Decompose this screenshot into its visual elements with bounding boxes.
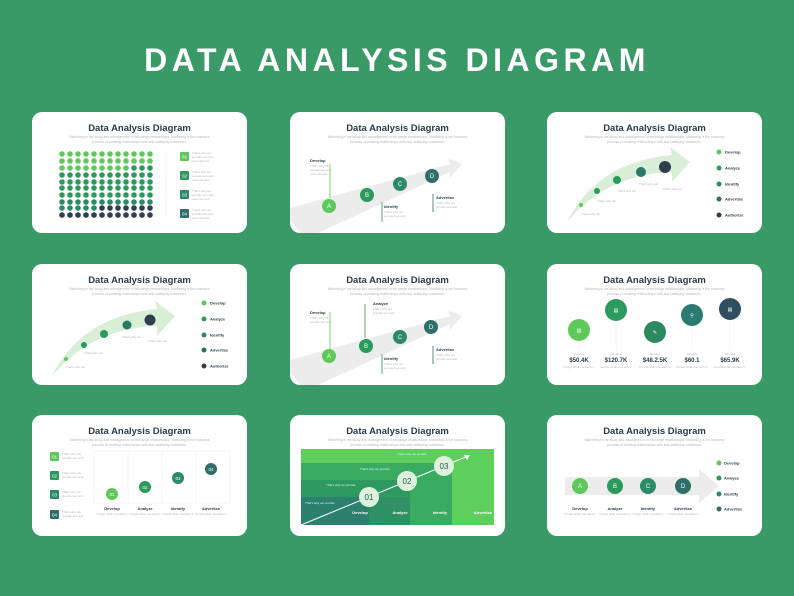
panel: numbered steps: 01: [52, 454, 57, 460]
panel: numbered steps: 04: [208, 467, 214, 472]
panel: value circles: ▤: [728, 307, 733, 313]
panel: numbered steps: [32, 415, 247, 536]
panel: numbered steps: Forget what company's: [130, 512, 161, 516]
legend boxes: That's why we: [192, 170, 211, 174]
panel: value circles: [547, 264, 762, 385]
title: DATA ANALYSIS DIAGRAM: [144, 42, 650, 78]
panel: ABCD diagonal 2: provide text and: [310, 320, 332, 324]
panel: curved arrow 2: That's why we: [148, 339, 167, 343]
legend boxes: 03: [182, 192, 187, 198]
panel: stepped growth: process of creating relationships with and satisfying customers.: [350, 443, 445, 447]
panel: ABCD diagonal 2: [290, 264, 505, 385]
panel: numbered steps: Identify: [171, 506, 186, 511]
panel: curved arrow 2: Marketing is the study and management of exchange relationships. Marketing is the business: [70, 287, 210, 291]
panel: arrow ABCD: Data Analysis Diagram: [603, 426, 706, 437]
panel: numbered steps: That's why we: [62, 490, 81, 494]
panel: numbered steps: That's why we: [62, 471, 81, 475]
legend boxes: That's why we: [192, 208, 211, 212]
panel: value circles: $60.1: [684, 358, 700, 364]
panel: arrow ABCD: Analyze: [724, 476, 740, 480]
panel: arrow ABCD: Advertise: [724, 506, 743, 512]
panel: curved arrow legend: That's why we: [617, 189, 636, 193]
panel: stepped growth: That's why we provide: [360, 467, 390, 471]
panel: numbered steps: provide text and: [62, 494, 84, 498]
panel: dot grid: [32, 112, 247, 233]
panel: curved arrow 2: Identify: [210, 332, 225, 338]
panel: ABCD diagonal 2: Develop: [310, 310, 326, 315]
legend boxes: That's why we: [192, 151, 211, 155]
legend boxes: provide text and: [192, 193, 214, 197]
panel: ABCD diagonal: Advertise: [436, 195, 455, 200]
panel: ABCD diagonal 2: Analyze: [373, 301, 389, 306]
panel: numbered steps: 04: [52, 512, 57, 518]
panel: curved arrow legend: That's why we: [639, 182, 658, 186]
panel: stepped growth: Marketing is the study and management of exchange relationships. Marketing is the business: [328, 438, 468, 442]
panel: stepped growth: Identify: [433, 510, 448, 515]
legend boxes: new columns.: [192, 197, 211, 201]
panel: arrow ABCD: [547, 415, 762, 536]
panel: curved arrow 2: Advertise: [210, 348, 229, 352]
panel: ABCD diagonal 2: D: [429, 325, 434, 331]
panel: numbered steps: Advertise: [202, 506, 221, 511]
legend boxes: 04: [182, 212, 187, 216]
panel: numbered steps: Forget what company's: [196, 512, 227, 516]
legend boxes: provide text and: [192, 155, 214, 159]
panel: numbered steps: 02: [52, 474, 57, 478]
panel: numbered steps: process of creating relationships with and satisfying customers.: [92, 443, 187, 447]
panel: stepped growth: That's why we provide: [305, 501, 335, 505]
panel: curved arrow legend: That's why we: [581, 212, 600, 216]
panel: value circles: $65.9K: [720, 358, 740, 364]
legend boxes: new columns.: [192, 216, 211, 220]
panel: numbered steps: Develop: [104, 506, 120, 511]
panel: stepped growth: 02: [403, 477, 412, 486]
panel: curved arrow 2: [32, 264, 247, 385]
panel: ABCD diagonal: That's why we: [310, 164, 329, 168]
panel: curved arrow legend: Authorize: [725, 212, 744, 218]
panel: arrow ABCD: D: [681, 484, 686, 490]
panel: value circles: Forget what company's: [715, 365, 746, 369]
panel: dot grid: Data Analysis Diagram: [88, 123, 191, 134]
panel: value circles: ✎: [653, 330, 657, 336]
panel: numbered steps: provide text and: [62, 456, 84, 460]
panel: ABCD diagonal: new columns.: [310, 172, 329, 176]
panel: curved arrow legend: process of creating relationships with and satisfying customers.: [607, 140, 702, 144]
panel: ABCD diagonal 2: Advertise: [436, 347, 455, 352]
legend boxes: [180, 151, 214, 220]
panel: stepped growth: 01: [365, 493, 374, 502]
panel: numbered steps: Forget what company's: [97, 512, 128, 516]
panel: arrow ABCD: Forget what company's: [633, 512, 664, 516]
panel: curved arrow legend: That's why we: [597, 199, 616, 203]
panel: arrow ABCD: Identify: [641, 506, 656, 511]
legend boxes: new columns.: [192, 159, 211, 163]
panel: ABCD diagonal: Data Analysis Diagram: [346, 123, 449, 134]
panel: numbered steps: Forget what company's: [163, 512, 194, 516]
panel: arrow ABCD: Identify: [724, 492, 739, 496]
panel: ABCD diagonal 2: That's why we: [373, 307, 392, 311]
panel: ABCD diagonal 2: That's why we: [310, 316, 329, 320]
panel: curved arrow 2: That's why we: [66, 365, 85, 369]
panel: numbered steps: 03: [52, 492, 57, 498]
panel: ABCD diagonal 2: C: [398, 335, 403, 341]
panel: arrow ABCD: Develop: [724, 460, 740, 466]
panel: curved arrow legend: Advertise: [725, 196, 744, 202]
panel: arrow ABCD: B: [613, 484, 617, 490]
panel: stepped growth: Data Analysis Diagram: [346, 426, 449, 437]
panel: value circles: $50.4K: [569, 358, 589, 364]
panel: arrow ABCD: Forget what company's: [600, 512, 631, 516]
panel: numbered steps: 02: [142, 485, 148, 490]
panel: value circles: ▤: [614, 308, 619, 314]
panel: stepped growth: That's why we provide: [397, 452, 427, 456]
panel: value circles: Develop: [686, 352, 698, 356]
panel: ABCD diagonal: [290, 112, 505, 233]
panel: value circles: Marketing is the study and management of exchange relationships. Marketing is the business: [585, 287, 725, 291]
legend boxes: provide text and: [192, 174, 214, 178]
panel: value circles: Forget what company's: [640, 365, 671, 369]
panel: numbered steps: Analyze: [137, 506, 153, 511]
panel: curved arrow 2: Analyze: [210, 316, 226, 322]
panel: numbered steps: provide text and: [62, 514, 84, 518]
panel: ABCD diagonal: That's why we: [436, 201, 455, 205]
panel: ABCD diagonal 2: Marketing is the study and management of exchange relationships. Marketing is the business: [328, 287, 468, 291]
panel: dot grid: Marketing is the study and management of exchange relationships. Marketing is the business: [70, 135, 210, 139]
panel: arrow ABCD: Forget what company's: [668, 512, 699, 516]
panel: curved arrow legend: Marketing is the study and management of exchange relationships. Marketing is the business: [585, 135, 725, 139]
panel: ABCD diagonal: C: [398, 182, 403, 188]
panel: curved arrow 2: That's why we: [84, 351, 103, 355]
panel: value circles: Develop: [573, 352, 585, 356]
panel: arrow ABCD: Advertise: [674, 506, 693, 511]
legend boxes: new columns.: [192, 178, 211, 182]
panel: stepped growth: Develop: [352, 510, 368, 515]
panel: curved arrow 2: Data Analysis Diagram: [88, 275, 191, 286]
panel: ABCD diagonal: Identify: [384, 204, 399, 209]
panel: numbered steps: That's why we: [62, 452, 81, 456]
panel: numbered steps: 03: [175, 476, 181, 481]
panel: numbered steps: Data Analysis Diagram: [88, 426, 191, 437]
panel: value circles: Forget what company's: [564, 365, 595, 369]
panel: ABCD diagonal 2: provide text and: [373, 311, 395, 315]
panel: value circles: Forget what company's: [677, 365, 708, 369]
panel: stepped growth: That's why we provide: [326, 483, 356, 487]
panel: ABCD diagonal 2: B: [364, 344, 368, 350]
panel: curved arrow legend: That's why we: [663, 187, 682, 191]
panel: ABCD diagonal: D: [430, 174, 435, 180]
panel: ABCD diagonal: That's why we: [384, 210, 403, 214]
panel: curved arrow legend: [547, 112, 762, 233]
panel: ABCD diagonal: Marketing is the study and management of exchange relationships. Marketing is the business: [328, 135, 468, 139]
panel: dot grid: process of creating relationships with and satisfying customers.: [92, 140, 187, 144]
panel: curved arrow 2: Develop: [210, 300, 226, 306]
panel: numbered steps: Marketing is the study and management of exchange relationships. Marketing is the business: [70, 438, 210, 442]
panel: value circles: process of creating relationships with and satisfying customers.: [607, 292, 702, 296]
panel: value circles: Develop: [649, 352, 661, 356]
panel: value circles: Develop: [610, 352, 622, 356]
panel: ABCD diagonal 2: That's why we: [436, 353, 455, 357]
panel: ABCD diagonal: provide text and: [310, 168, 332, 172]
panel: ABCD diagonal: process of creating relationships with and satisfying customers.: [350, 140, 445, 144]
panel: arrow ABCD: process of creating relationships with and satisfying customers.: [607, 443, 702, 447]
panel: stepped growth: 03: [440, 462, 449, 471]
panel: arrow ABCD: C: [646, 484, 651, 490]
panel: ABCD diagonal 2: provide text and: [436, 357, 458, 361]
panel: value circles: Forget what company's: [601, 365, 632, 369]
legend boxes: That's why we: [192, 189, 211, 193]
panel: ABCD diagonal 2: A: [327, 354, 331, 360]
panel: value circles: $120.7K: [605, 358, 628, 364]
panel: value circles: Develop: [724, 352, 736, 356]
panel: value circles: $48.2.5K: [643, 358, 668, 364]
panel: arrow ABCD: Forget what company's: [565, 512, 596, 516]
panel: arrow ABCD: A: [578, 484, 582, 490]
panel: value circles: ▥: [577, 328, 582, 334]
panel: curved arrow legend: Analyze: [725, 166, 741, 170]
panel: numbered steps: provide text and: [62, 475, 84, 479]
panel: curved arrow legend: Develop: [725, 150, 741, 154]
legend boxes: 01: [182, 154, 187, 160]
legend boxes: provide text and: [192, 212, 214, 216]
panel: curved arrow 2: Authorize: [210, 364, 229, 368]
panel: ABCD diagonal: B: [365, 193, 369, 199]
panel: numbered steps: That's why we: [62, 510, 81, 514]
panel: curved arrow 2: process of creating relationships with and satisfying customers.: [92, 292, 187, 296]
panel: ABCD diagonal: Develop: [310, 158, 326, 163]
panel: ABCD diagonal 2: process of creating relationships with and satisfying customers.: [350, 292, 445, 296]
panel: value circles: Data Analysis Diagram: [603, 275, 706, 286]
panel: ABCD diagonal 2: Identify: [384, 356, 399, 361]
panel: ABCD diagonal: provide text and: [384, 214, 406, 218]
panel: ABCD diagonal 2: That's why we: [384, 362, 403, 366]
legend boxes: 02: [182, 174, 187, 178]
panel: ABCD diagonal: provide text and: [436, 205, 458, 209]
panel: arrow ABCD: Marketing is the study and management of exchange relationships. Marketing is the business: [585, 438, 725, 442]
panel: ABCD diagonal 2: Data Analysis Diagram: [346, 275, 449, 286]
panel: ABCD diagonal: A: [327, 204, 331, 210]
panel: numbered steps: 01: [109, 492, 115, 497]
panel: stepped growth: [290, 415, 505, 536]
panel: ABCD diagonal 2: provide text and: [384, 366, 406, 370]
panel: stepped growth: Advertise: [474, 510, 493, 515]
panel: arrow ABCD: Analyze: [607, 506, 623, 511]
panel: stepped growth: Analyze: [392, 510, 408, 515]
panel: value circles: ⚲: [690, 313, 694, 319]
panel: curved arrow 2: That's why we: [122, 335, 141, 339]
panel: arrow ABCD: Develop: [572, 506, 588, 511]
panel: curved arrow legend: Data Analysis Diagram: [603, 123, 706, 134]
panel: curved arrow legend: Identify: [725, 182, 740, 186]
